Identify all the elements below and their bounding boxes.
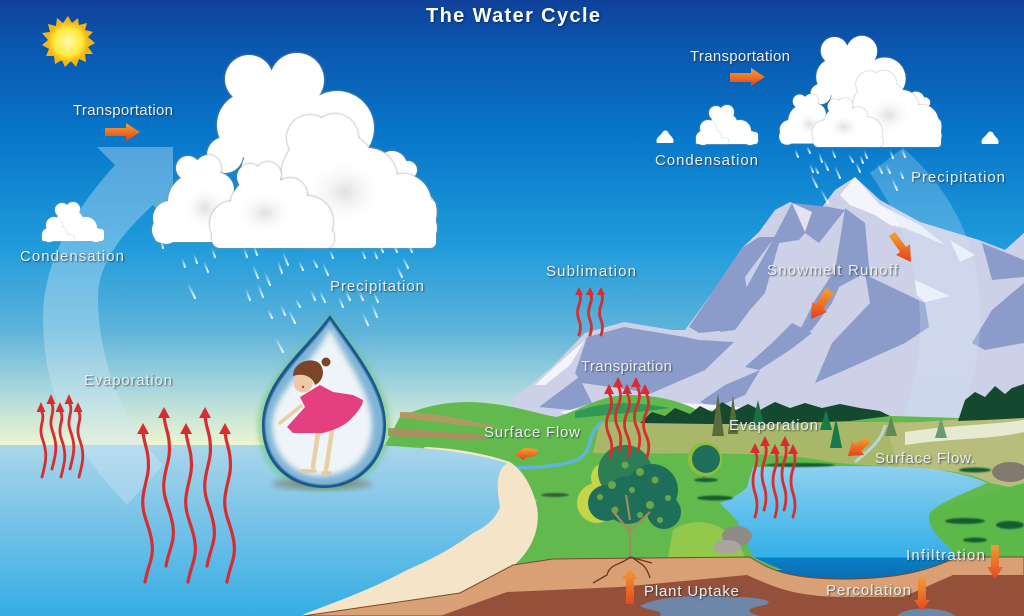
tree line bbox=[640, 384, 1024, 448]
label: surface flow right: Surface Flow. bbox=[875, 450, 975, 467]
water drop with girl bbox=[258, 313, 390, 490]
sky background bbox=[0, 0, 1024, 446]
upper right field bbox=[885, 410, 1024, 490]
dark soil bbox=[440, 575, 1024, 616]
red wave arrows: sublimation bbox=[575, 287, 605, 335]
mountain shadows bbox=[539, 203, 1024, 410]
label: transportation right: Transportation bbox=[690, 48, 790, 65]
rocks bbox=[713, 462, 1024, 554]
label: plant uptake: Plant Uptake bbox=[644, 583, 739, 600]
orange arrow: surface flow right bbox=[848, 437, 870, 456]
orange arrow: percolation bbox=[914, 577, 930, 611]
sea bbox=[0, 445, 540, 616]
title: The Water Cycle bbox=[426, 5, 600, 27]
red wave arrows: lake evaporation bbox=[750, 436, 798, 517]
girl mouth bbox=[302, 386, 304, 388]
big pale arrow: right cycle bbox=[855, 148, 981, 503]
red wave arrows: sea small bbox=[36, 394, 83, 477]
large cloud bbox=[152, 53, 437, 248]
lake bbox=[720, 466, 987, 579]
pale cycle arrow: left bbox=[43, 147, 173, 505]
right lake bank bbox=[929, 483, 1024, 557]
cloud: left small bbox=[42, 202, 104, 242]
sand beach bbox=[300, 447, 538, 616]
drop ground shadow bbox=[272, 478, 372, 490]
hill dark patch bbox=[575, 403, 670, 418]
label: precipitation left: Precipitation bbox=[330, 278, 424, 295]
green land base bbox=[385, 395, 1024, 570]
large tree bbox=[577, 445, 681, 583]
girl face bbox=[294, 374, 312, 392]
drop rim bbox=[262, 315, 386, 488]
cloud: tiny left bbox=[657, 130, 674, 143]
field stripes bbox=[400, 412, 500, 427]
dark shrubs bbox=[541, 463, 1024, 542]
ground water bbox=[640, 596, 769, 616]
label: evaporation sea: Evaporation bbox=[84, 372, 172, 389]
cloud: right large bbox=[779, 36, 942, 147]
girl hair bbox=[293, 360, 323, 385]
hair bun bbox=[322, 358, 330, 366]
label: evaporation lake: Evaporation bbox=[729, 417, 818, 434]
small tree bbox=[688, 442, 722, 481]
label: transportation left: Transportation bbox=[73, 102, 173, 119]
drop inner bbox=[272, 328, 372, 476]
stream bbox=[500, 422, 602, 468]
label: surface flow left: Surface Flow bbox=[484, 424, 580, 441]
orange arrow: surface flow left bbox=[515, 448, 538, 460]
land bbox=[385, 395, 1024, 570]
label: sublimation: Sublimation bbox=[546, 263, 636, 280]
girl dress bbox=[287, 385, 363, 433]
sea foreground patch bbox=[0, 446, 507, 616]
sun bbox=[42, 16, 95, 67]
far meadow bbox=[593, 422, 1024, 480]
yellow meadow patch bbox=[668, 522, 745, 557]
cloud: tiny right bbox=[982, 131, 999, 144]
girl feet bbox=[302, 471, 330, 473]
rain: right cloud bbox=[795, 147, 905, 203]
red wave arrows: sea large bbox=[137, 407, 234, 582]
orange arrow: transportation left bbox=[105, 123, 140, 141]
label: snowmelt runoff: Snowmelt Runoff bbox=[767, 262, 899, 279]
mountains bbox=[512, 177, 1024, 420]
soil layers bbox=[303, 557, 1024, 616]
drop glow bbox=[258, 313, 390, 490]
cloud: right small bbox=[696, 105, 758, 145]
mountain silhouette bbox=[512, 177, 1024, 420]
label: condensation right: Condensation bbox=[655, 152, 758, 169]
label: precipitation right: Precipitation bbox=[911, 169, 1005, 186]
rain: large cloud bbox=[161, 242, 412, 352]
orange arrow: snowmelt lower bbox=[811, 288, 834, 319]
girl arm bbox=[280, 406, 301, 423]
label: transpiration: Transpiration bbox=[581, 358, 672, 375]
label: condensation left: Condensation bbox=[20, 248, 124, 265]
mountain snow highlights bbox=[535, 177, 975, 416]
red wave arrows: transpiration bbox=[604, 377, 650, 457]
label: percolation: Percolation bbox=[826, 582, 911, 599]
orange arrow: infiltration bbox=[987, 545, 1003, 579]
orange arrow: transportation right bbox=[730, 68, 765, 86]
orange arrow: snowmelt upper bbox=[889, 232, 911, 262]
light soil bbox=[303, 557, 1024, 616]
label: infiltration: Infiltration bbox=[906, 547, 985, 564]
orange arrow: plant uptake bbox=[622, 569, 638, 604]
girl legs bbox=[313, 431, 332, 470]
drop mid band bbox=[265, 320, 383, 485]
